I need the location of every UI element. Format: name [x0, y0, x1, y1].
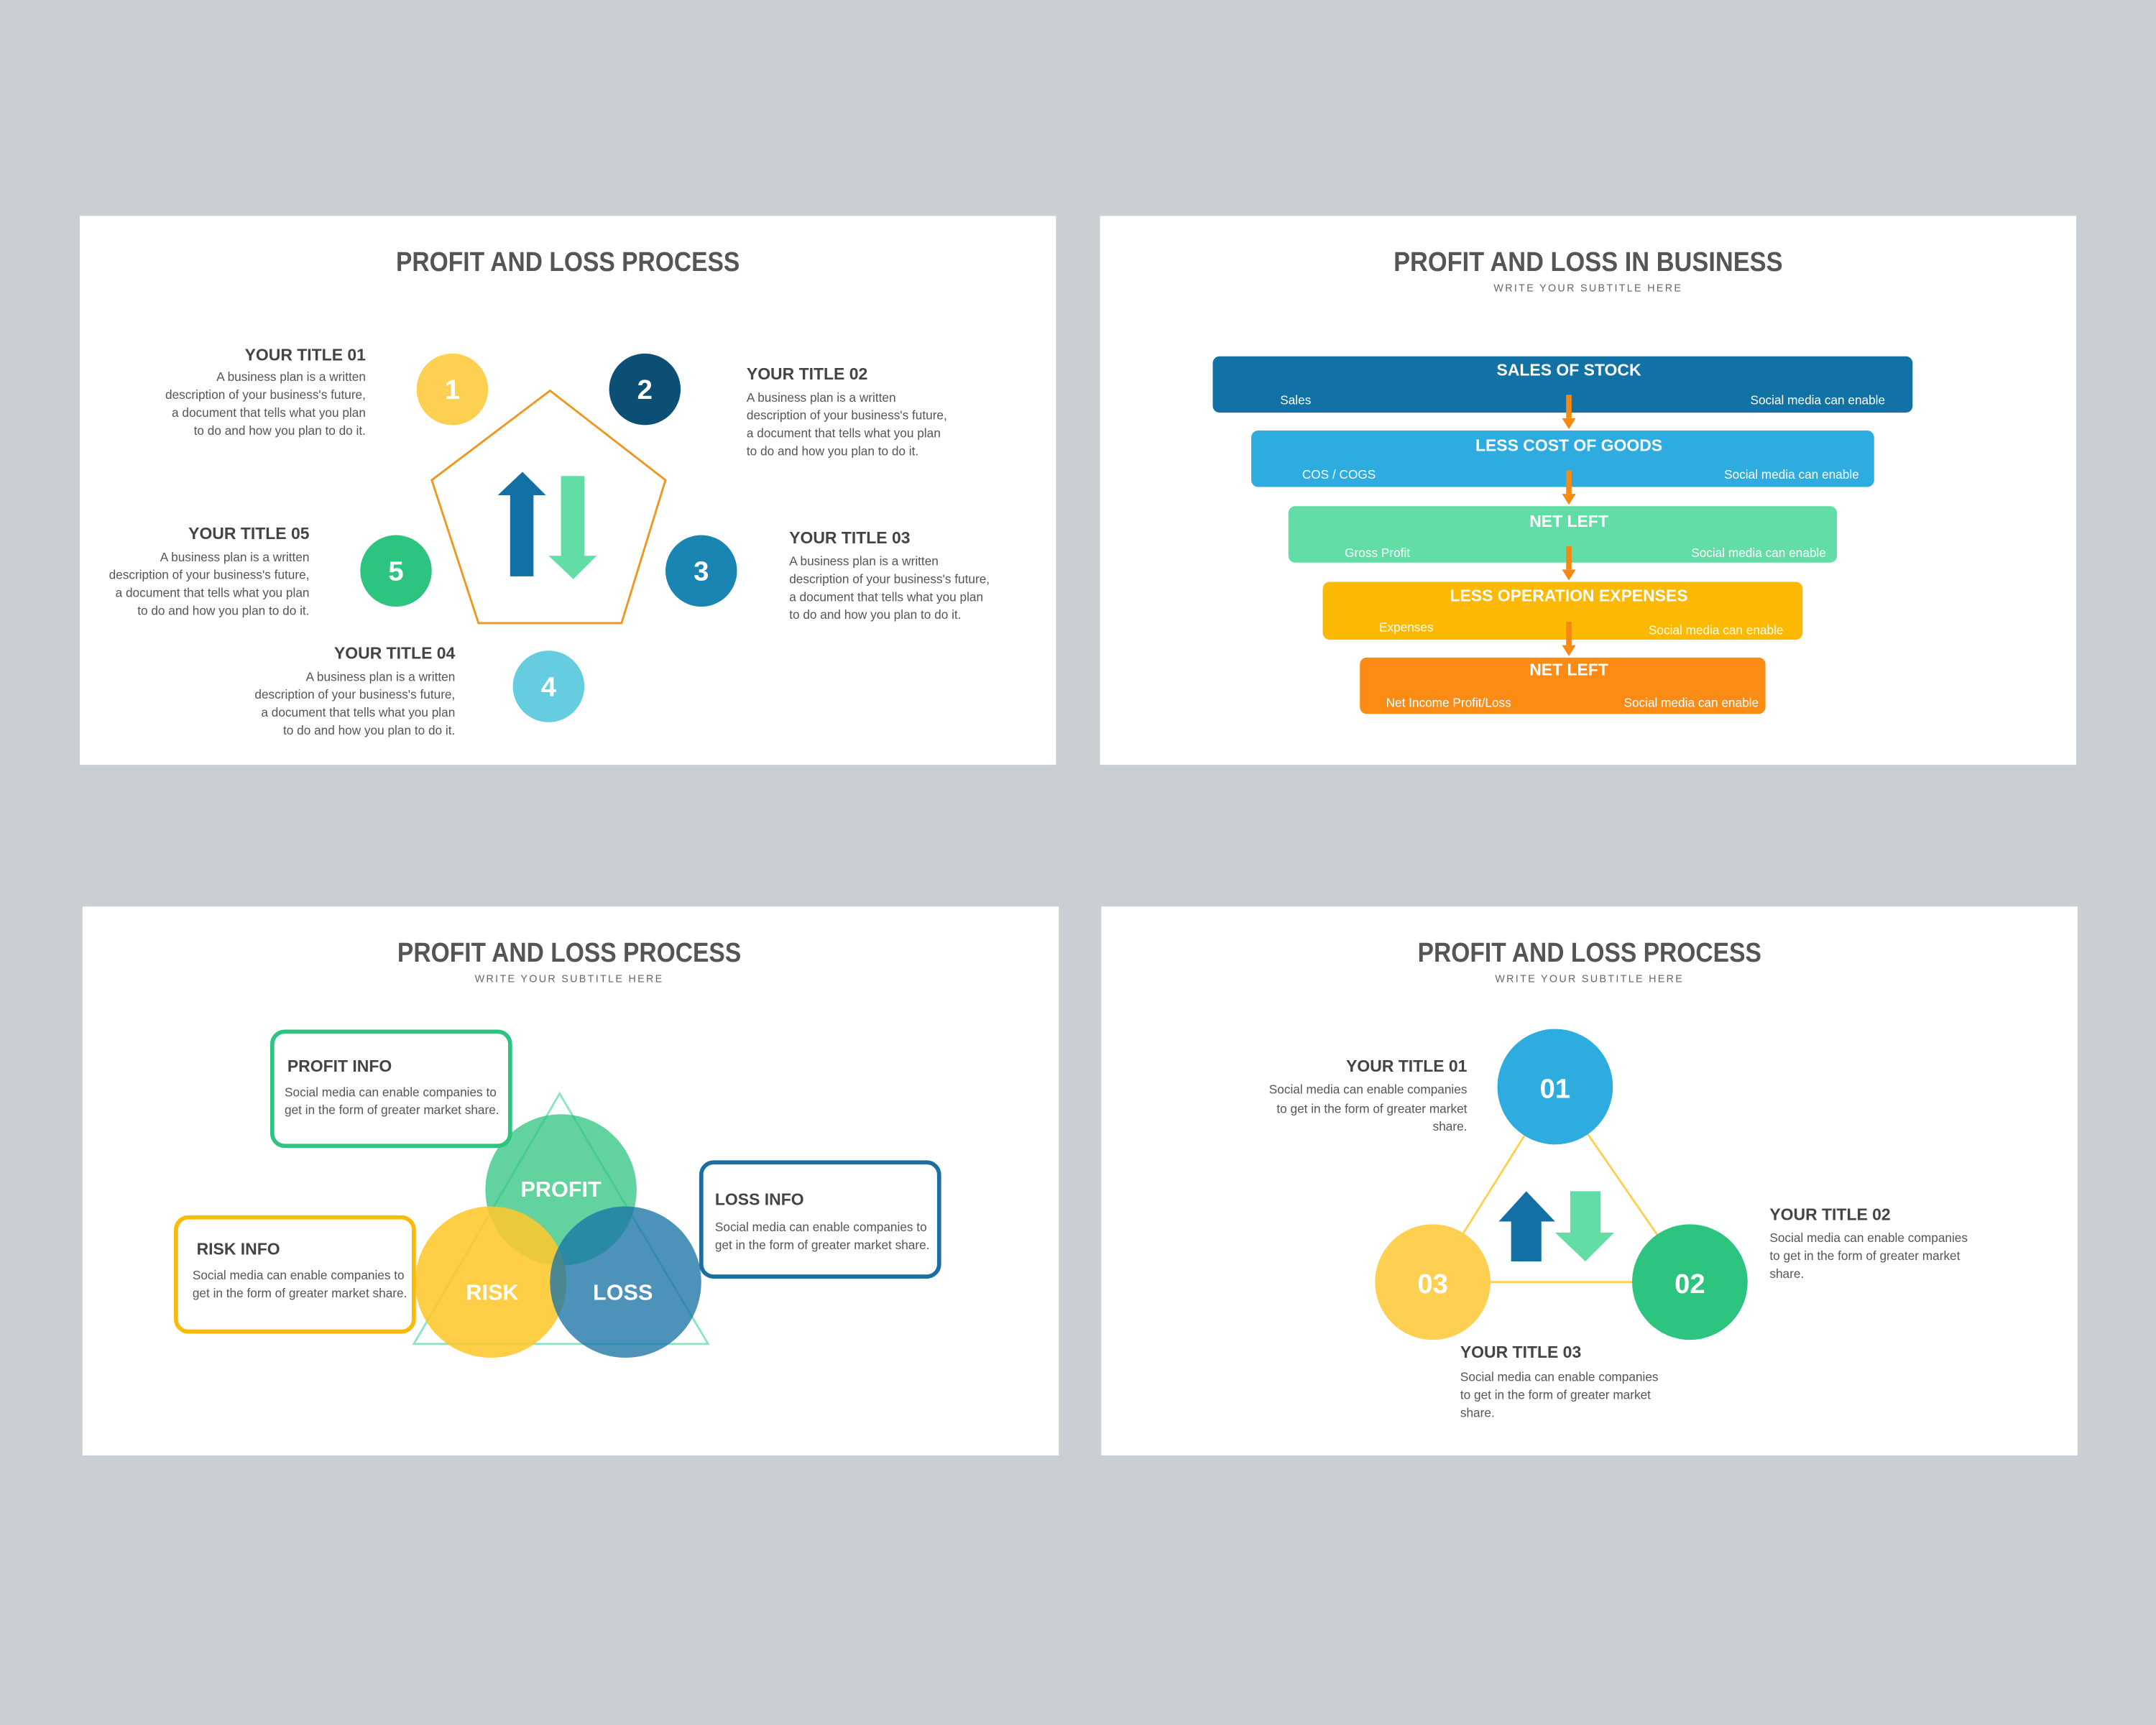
title: profit and loss in business: PROFIT AND LOSS IN BUSINESS	[1393, 247, 1783, 277]
title: profit and loss process: PROFIT AND LOSS PROCESS	[396, 247, 740, 277]
text block 04: a document that tells what you plan	[261, 705, 455, 719]
text block 01: to do and how you plan to do it.	[194, 423, 366, 438]
circle 2: 2	[637, 374, 653, 405]
circle 03	[1375, 1224, 1491, 1340]
box: loss info: get in the form of greater market share.	[715, 1238, 929, 1252]
text block 05: YOUR TITLE 05	[188, 524, 310, 543]
text block 01: YOUR TITLE 01	[245, 345, 366, 364]
text block 03: A business plan is a written	[789, 554, 939, 569]
text block 01: YOUR TITLE 01	[1346, 1057, 1468, 1075]
circle 1: 1	[445, 374, 460, 405]
venn labels: LOSS	[593, 1281, 653, 1305]
text block 01: to get in the form of greater market	[1276, 1101, 1468, 1116]
arrows: orange connectors	[1562, 395, 1576, 656]
text block 04	[254, 644, 456, 737]
text block 02: description of your business's future,	[747, 408, 947, 423]
circle: loss	[550, 1206, 701, 1358]
box: risk info	[176, 1218, 414, 1332]
box: profit info	[272, 1031, 510, 1146]
bar: net left: Gross Profit	[1345, 546, 1410, 560]
panel: pentagon process	[80, 216, 1056, 765]
bar: less operation expenses	[1323, 582, 1802, 640]
subtitle: WRITE YOUR SUBTITLE HERE	[1495, 974, 1684, 985]
text block 02: a document that tells what you plan	[747, 426, 941, 441]
text block 04: A business plan is a written	[306, 669, 455, 684]
text block 03	[789, 528, 990, 622]
text block 03: to do and how you plan to do it.	[789, 607, 962, 622]
pentagon outline	[432, 391, 665, 623]
text block 02: YOUR TITLE 02	[1769, 1205, 1891, 1224]
subtitle: WRITE YOUR SUBTITLE HERE	[1493, 283, 1682, 295]
circle 03: 03	[1417, 1269, 1448, 1300]
bar: less cost of goods: LESS COST OF GOODS	[1475, 436, 1662, 455]
icon: down arrow	[1555, 1191, 1614, 1261]
text block 05	[109, 524, 310, 618]
venn labels: PROFIT	[521, 1177, 602, 1202]
text block 03: to get in the form of greater market	[1460, 1387, 1651, 1402]
bar: less operation expenses: LESS OPERATION EXPENSES	[1450, 586, 1688, 604]
text block 02: to get in the form of greater market	[1769, 1248, 1961, 1263]
text block 04: YOUR TITLE 04	[334, 644, 456, 663]
box: loss info	[701, 1162, 939, 1276]
circle 01	[1498, 1029, 1613, 1144]
text block 01: share.	[1433, 1119, 1467, 1133]
venn labels	[466, 1177, 653, 1305]
bar: net left final: NET LEFT	[1529, 661, 1608, 679]
text block 05: A business plan is a written	[160, 550, 309, 564]
subtitle: WRITE YOUR SUBTITLE HERE	[475, 974, 664, 985]
text block 05: a document that tells what you plan	[116, 586, 309, 600]
text block 02: to do and how you plan to do it.	[747, 443, 918, 458]
venn labels: RISK	[466, 1281, 519, 1305]
title: PROFIT AND LOSS PROCESS	[397, 937, 741, 968]
circle 02: 02	[1674, 1269, 1705, 1300]
text block 04: to do and how you plan to do it.	[283, 723, 455, 737]
panel: triangle cycle	[1102, 906, 2078, 1455]
circle: risk	[415, 1206, 566, 1358]
text block 01	[165, 345, 366, 438]
circle: profit	[485, 1114, 637, 1266]
text block 01: Social media can enable companies	[1269, 1082, 1467, 1097]
bar: sales of stock: Social media can enable	[1750, 393, 1885, 408]
text block 03: share.	[1460, 1405, 1495, 1420]
text block 02: Social media can enable companies	[1769, 1230, 1968, 1245]
bar: net left final: Social media can enable	[1623, 696, 1759, 710]
text block 05: description of your business's future,	[109, 568, 309, 582]
text block 02	[1769, 1205, 1968, 1281]
text block 02: share.	[1769, 1266, 1804, 1281]
panel: venn diagram	[83, 906, 1059, 1455]
text block 03: YOUR TITLE 03	[1460, 1343, 1581, 1361]
box: risk info: RISK INFO	[197, 1239, 280, 1258]
box: risk info: Social media can enable companies to	[193, 1268, 405, 1282]
bar: less operation expenses: Expenses	[1379, 620, 1434, 634]
circle 5	[360, 535, 432, 607]
box: profit info: get in the form of greater market share.	[285, 1103, 499, 1117]
bar: net left	[1289, 506, 1837, 563]
text block 03: a document that tells what you plan	[789, 589, 983, 604]
circle 4: 4	[541, 671, 557, 702]
circle 3: 3	[694, 556, 709, 587]
panel: funnel bars	[1100, 216, 2076, 765]
bar: less cost of goods	[1251, 431, 1874, 487]
bar: net left: Social media can enable	[1691, 546, 1826, 560]
text block 01: a document that tells what you plan	[172, 405, 366, 420]
bar: less cost of goods: COS / COGS	[1302, 467, 1376, 482]
text block 03	[1460, 1343, 1659, 1420]
bar: sales of stock: Sales	[1280, 393, 1311, 408]
box: profit info: Social media can enable companies to	[285, 1085, 497, 1099]
circle 3	[665, 535, 737, 607]
bar: net left final: Net Income Profit/Loss	[1386, 696, 1511, 710]
icon: up arrow	[1498, 1191, 1555, 1261]
circle 01: 01	[1540, 1073, 1570, 1104]
bar: less operation expenses: Social media can enable	[1649, 622, 1784, 637]
bar: sales of stock	[1213, 356, 1912, 413]
box: loss info: LOSS INFO	[715, 1190, 804, 1209]
text block 01	[1269, 1057, 1468, 1133]
icon: up arrow	[498, 472, 546, 576]
text block 03: YOUR TITLE 03	[789, 528, 911, 547]
circle 02	[1632, 1224, 1748, 1340]
bar: sales of stock: SALES OF STOCK	[1497, 360, 1641, 379]
icon: down arrow	[548, 476, 596, 579]
bar: less cost of goods: Social media can enable	[1724, 467, 1859, 482]
box: risk info: get in the form of greater market share.	[193, 1286, 407, 1300]
box: profit info: PROFIT INFO	[287, 1057, 392, 1075]
circle 2	[609, 354, 681, 425]
text block 03: Social media can enable companies	[1460, 1370, 1659, 1384]
triangle outline	[414, 1094, 708, 1344]
text block 04: description of your business's future,	[254, 687, 455, 702]
text block 02: A business plan is a written	[747, 390, 896, 405]
bar: net left: NET LEFT	[1529, 512, 1608, 530]
text block 01: A business plan is a written	[216, 369, 366, 384]
text block 02: YOUR TITLE 02	[747, 364, 867, 383]
text block 05: to do and how you plan to do it.	[137, 603, 309, 618]
triangle outline	[1433, 1087, 1690, 1282]
circle 4	[513, 650, 584, 722]
title: PROFIT AND LOSS PROCESS	[1418, 937, 1761, 968]
circle 5: 5	[388, 556, 404, 587]
circle 1	[417, 354, 488, 425]
text block 01: description of your business's future,	[165, 387, 366, 402]
text block 03: description of your business's future,	[789, 571, 990, 586]
bar: net left final	[1360, 658, 1766, 714]
text block 02	[747, 364, 947, 458]
box: loss info: Social media can enable companies to	[715, 1220, 927, 1234]
